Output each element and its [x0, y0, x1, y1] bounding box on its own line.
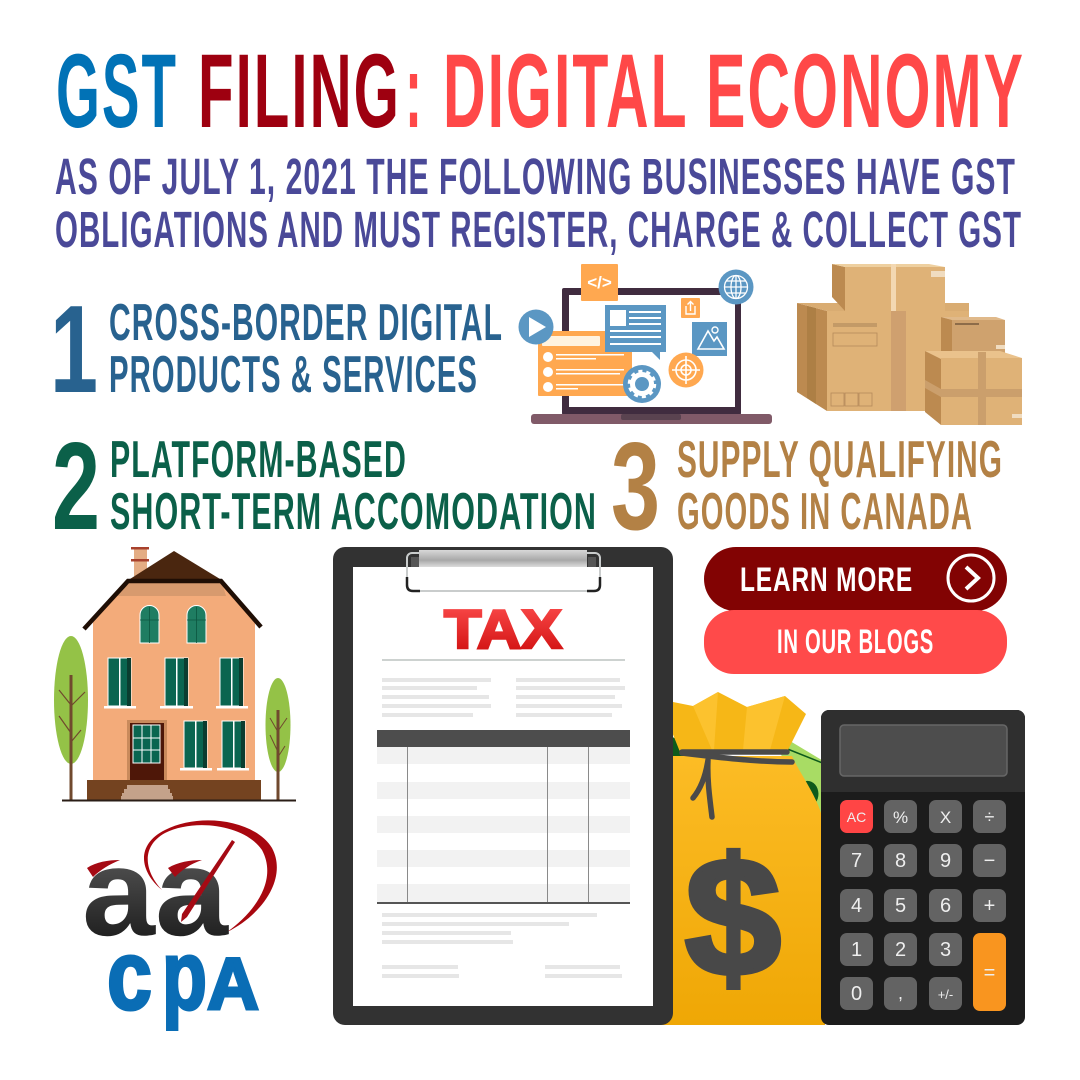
item 1: cross-border digital products: PRODUCTS & SERVICES	[109, 346, 478, 404]
icon: calculator	[821, 710, 1025, 1025]
icon: calculator: =	[984, 962, 995, 984]
icon: money bag	[660, 692, 830, 1025]
logo: aa CPA: aa	[82, 824, 229, 962]
icon: calculator: +/-	[938, 987, 953, 1002]
icon: calculator: 2	[895, 939, 906, 961]
icon: house with trees	[54, 547, 296, 802]
icon: calculator: ,	[898, 983, 903, 1003]
icon: calculator: 1	[851, 939, 862, 961]
logo: aa CPA: c	[107, 920, 152, 1030]
icon: calculator: AC	[847, 809, 866, 825]
icon: calculator: 7	[851, 850, 862, 872]
table	[377, 730, 630, 904]
logo: aa CPA: p	[162, 920, 207, 1030]
title	[56, 33, 1025, 150]
icon: laptop with digital services	[518, 264, 772, 424]
item 2: platform-based accommodation	[52, 418, 597, 556]
icon: calculator: 8	[895, 850, 906, 872]
item 3: qualifying goods: 3	[611, 418, 660, 556]
icon: money bag: $	[685, 823, 781, 1011]
subtitle	[55, 148, 1022, 258]
icon: calculator: %	[893, 808, 908, 827]
item 2: platform-based accommodation: 2	[52, 418, 100, 556]
button: in our blogs	[704, 610, 1007, 674]
title: :	[405, 33, 422, 150]
button: learn more	[704, 547, 1007, 611]
item 2: platform-based accommodation: SHORT-TERM ACCOMODATION	[110, 483, 597, 541]
item 1: cross-border digital products: CROSS-BORDER DIGITAL	[109, 294, 503, 352]
heading: TAX: TAX	[444, 598, 562, 660]
icon: calculator: 3	[940, 939, 951, 961]
icon: cardboard boxes	[797, 264, 1022, 425]
icon: calculator: 5	[895, 895, 906, 917]
title: FILING	[198, 33, 401, 150]
icon: clipboard with tax form	[333, 547, 673, 1025]
icon: calculator: +	[984, 895, 995, 917]
icon: calculator: 0	[851, 983, 862, 1005]
title: GST	[56, 33, 178, 150]
item 3: qualifying goods	[611, 418, 1003, 556]
item 2: platform-based accommodation: PLATFORM-BASED	[110, 431, 407, 489]
icon: calculator: 6	[940, 895, 951, 917]
clip	[407, 550, 600, 591]
item 1: cross-border digital products: 1	[50, 281, 98, 419]
icon: calculator: ÷	[985, 807, 995, 827]
icon: calculator: −	[984, 850, 995, 872]
logo: aa CPA: A	[207, 944, 259, 1025]
icon: calculator: X	[940, 808, 951, 827]
item 1: cross-border digital products	[50, 281, 503, 419]
button: learn more: LEARN MORE	[740, 561, 913, 599]
icon: laptop with digital services: </>	[587, 273, 612, 292]
icon: calculator: 4	[851, 895, 862, 917]
logo: aa CPA	[82, 820, 277, 1030]
button: in our blogs: IN OUR BLOGS	[777, 623, 934, 661]
icon: calculator: 9	[940, 850, 951, 872]
